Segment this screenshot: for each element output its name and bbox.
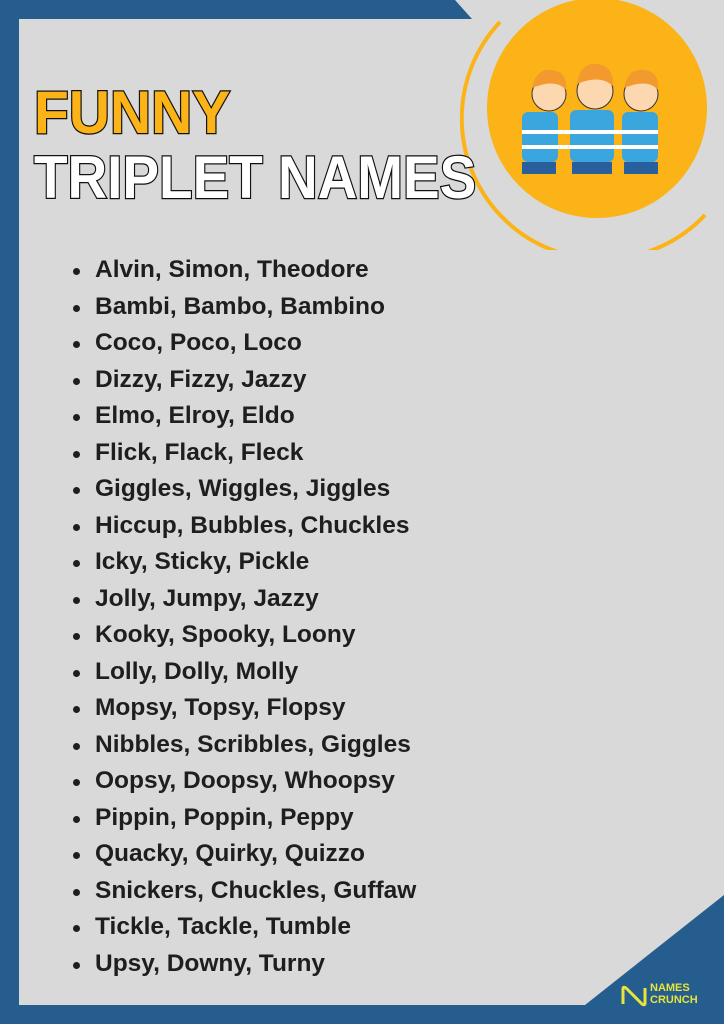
name list: Elmo, Elroy, Eldo: [95, 402, 295, 429]
name list: Kooky, Spooky, Loony: [95, 621, 355, 648]
name list: Lolly, Dolly, Molly: [95, 658, 298, 684]
logo: names crunch: NAMES: [650, 982, 690, 994]
title: [33, 79, 476, 211]
name list: Quacky, Quirky, Quizzo: [95, 840, 365, 867]
name list: Dizzy, Fizzy, Jazzy: [95, 366, 306, 392]
name list: Giggles, Wiggles, Jiggles: [95, 475, 390, 502]
title: TRIPLET NAMES: [34, 144, 476, 211]
name list: Snickers, Chuckles, Guffaw: [95, 876, 416, 904]
name list: Tickle, Tackle, Tumble: [95, 913, 351, 940]
name list: Coco, Poco, Loco: [95, 329, 302, 356]
name list: Oopsy, Doopsy, Whoopsy: [95, 767, 395, 794]
name list: [73, 256, 416, 976]
name list: Bambi, Bambo, Bambino: [95, 292, 385, 320]
name list: Alvin, Simon, Theodore: [95, 256, 369, 283]
illustration: triplets in orange circle: [460, 0, 707, 250]
name list: Upsy, Downy, Turny: [95, 950, 325, 976]
name list: Icky, Sticky, Pickle: [95, 548, 309, 575]
name list: Flick, Flack, Fleck: [95, 438, 303, 466]
name list: Pippin, Poppin, Peppy: [95, 804, 354, 830]
name list: Jolly, Jumpy, Jazzy: [95, 584, 319, 612]
name list: Nibbles, Scribbles, Giggles: [95, 730, 411, 758]
name list: Hiccup, Bubbles, Chuckles: [95, 512, 410, 538]
title: FUNNY: [34, 79, 230, 146]
name list: Mopsy, Topsy, Flopsy: [95, 694, 345, 721]
logo: names crunch: CRUNCH: [650, 994, 698, 1006]
logo: names crunch: [622, 982, 698, 1006]
